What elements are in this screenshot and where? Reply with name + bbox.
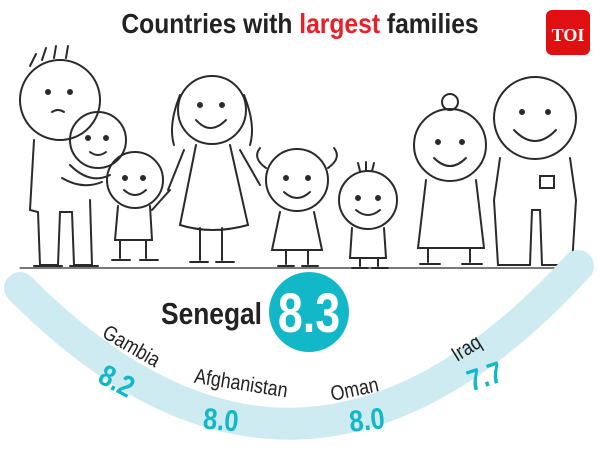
ground	[20, 267, 580, 269]
label: Oman	[328, 373, 386, 438]
label: Iraq	[447, 330, 507, 398]
label: Senegal: Senegal	[161, 297, 262, 332]
title: Countries with largest families	[121, 8, 479, 39]
figure: boy	[107, 152, 170, 260]
figure: small boy	[339, 162, 397, 268]
label: Iraq: 7.7	[463, 355, 507, 398]
figure: father	[20, 46, 100, 266]
label: Afghanistan	[193, 365, 289, 438]
figure: baby	[62, 112, 126, 185]
label: Afghanistan: 8.0	[202, 402, 240, 438]
label: Senegal: 8.3	[278, 281, 340, 344]
logo: TOI	[546, 10, 590, 55]
label: Oman: Oman	[328, 373, 381, 406]
label: Senegal	[161, 272, 349, 352]
label: Gambia	[93, 321, 164, 404]
label: Iraq: Iraq	[447, 330, 486, 367]
arc band	[20, 266, 578, 424]
label: Gambia: 8.2	[93, 358, 140, 404]
label: Gambia: Gambia	[98, 321, 164, 372]
label: Oman: 8.0	[348, 401, 386, 438]
label: Afghanistan: Afghanistan	[193, 365, 289, 403]
figure: grandfather	[494, 77, 576, 265]
figure: girl	[257, 148, 337, 266]
illustration: family line art	[20, 46, 580, 268]
figure: mother	[168, 76, 260, 262]
logo: TOI: TOI	[552, 25, 584, 45]
figure: grandmother	[414, 94, 486, 264]
